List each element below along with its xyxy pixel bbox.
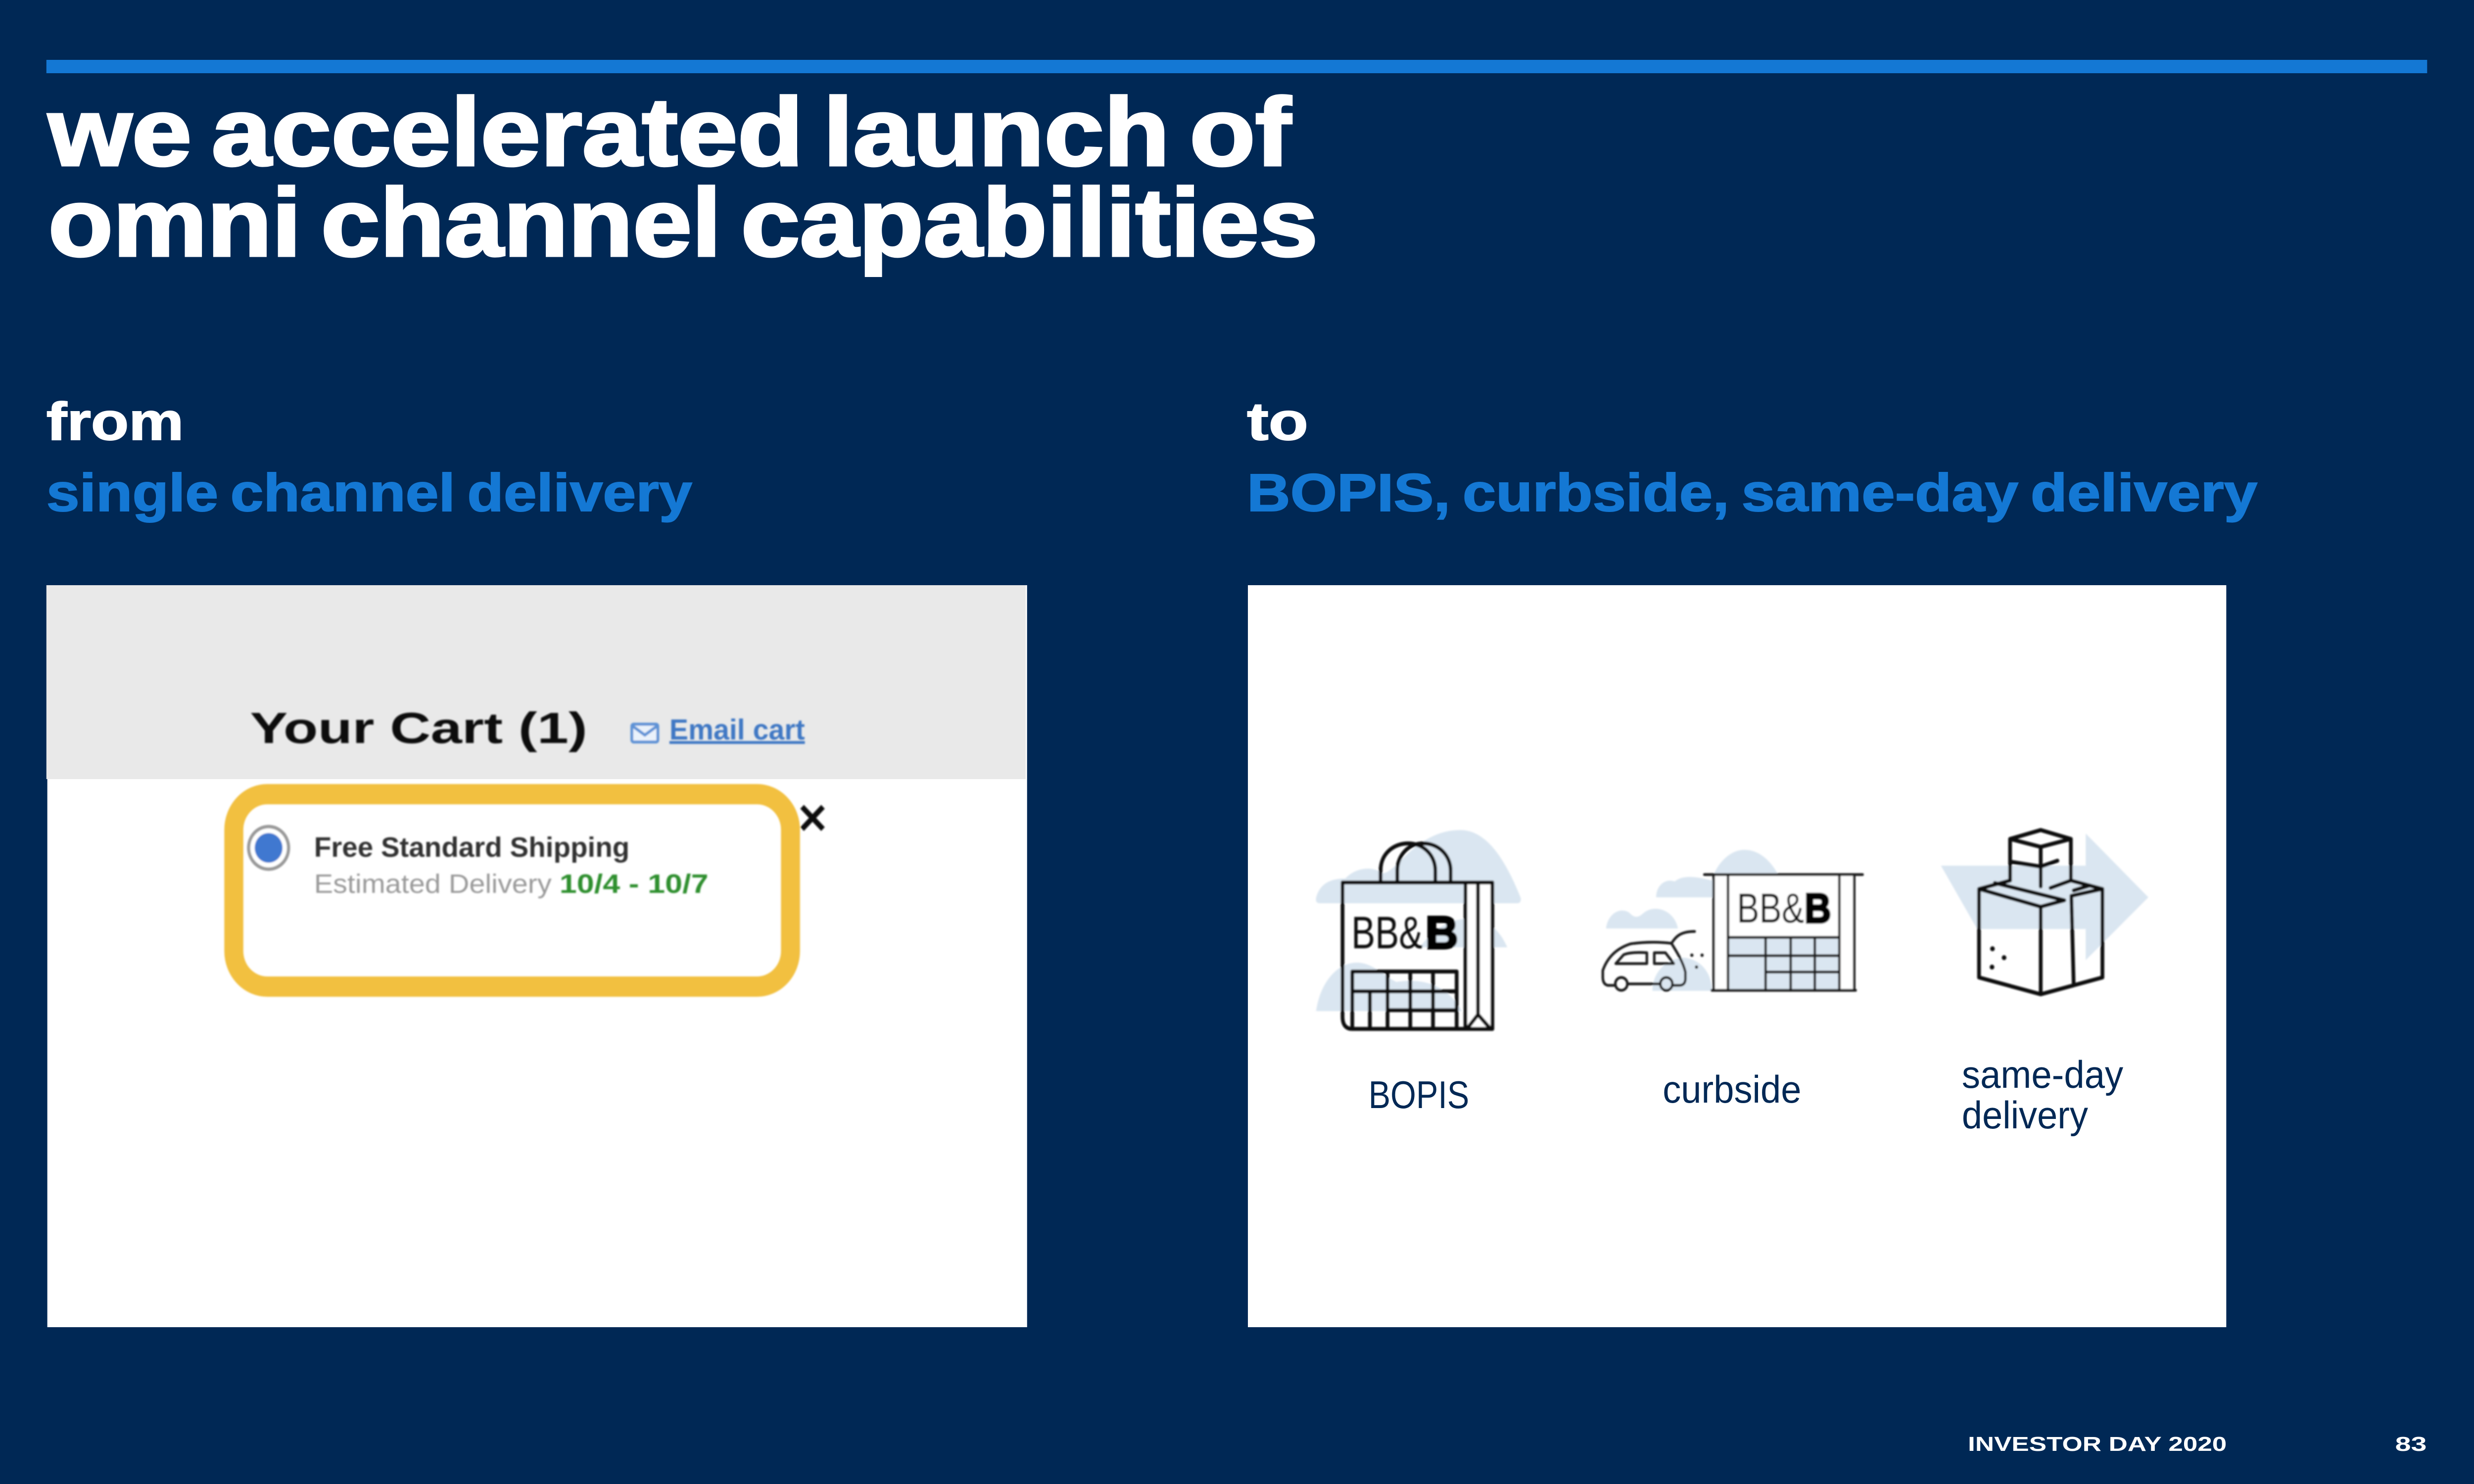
same-day delivery label: delivery (1962, 1094, 2088, 1137)
right column heading (1247, 392, 2257, 523)
title: omni channel capabilities (48, 169, 1318, 277)
title: we accelerated launch of (48, 79, 1291, 186)
panel: cart screenshot (47, 585, 1027, 1327)
close icon (802, 807, 823, 829)
email cart link: Email cart (669, 713, 805, 745)
same-day delivery label: same-day (1962, 1054, 2123, 1097)
icon: same-day delivery boxes (1941, 830, 2148, 994)
curbside label: curbside (1663, 1068, 1802, 1112)
same-day delivery label (1962, 1054, 2123, 1137)
title (48, 79, 1318, 277)
BOPIS label: BOPIS (1369, 1074, 1469, 1117)
left column heading (47, 392, 692, 523)
panel: fulfilment options (1248, 585, 2226, 1327)
footer label: INVESTOR DAY 2020 (1968, 1433, 2227, 1455)
icon: curbside pickup (1603, 850, 1862, 991)
icon: BOPIS bag: BB& (1351, 907, 1423, 958)
icon: curbside pickup: BB& (1737, 885, 1804, 932)
delivery estimate: Estimated Delivery (314, 870, 552, 899)
left column heading: from (47, 392, 184, 452)
icon: BOPIS bag (1316, 830, 1521, 1029)
right column heading: BOPIS, curbside, same-day delivery (1247, 463, 2257, 523)
delivery dates: 10/4 - 10/7 (560, 870, 709, 899)
radio button (249, 827, 288, 869)
left column heading: single channel delivery (47, 463, 692, 523)
top accent bar (47, 60, 2427, 73)
highlight box (234, 794, 791, 986)
shipping option: Free Standard Shipping (314, 831, 629, 863)
cart heading: Your Cart (1) (250, 704, 587, 753)
icon: envelope (632, 724, 658, 742)
icon: BOPIS bag: B (1426, 907, 1458, 958)
right column heading: to (1247, 392, 1308, 452)
icon: curbside pickup: B (1805, 885, 1831, 932)
page number: 83 (2395, 1433, 2426, 1455)
